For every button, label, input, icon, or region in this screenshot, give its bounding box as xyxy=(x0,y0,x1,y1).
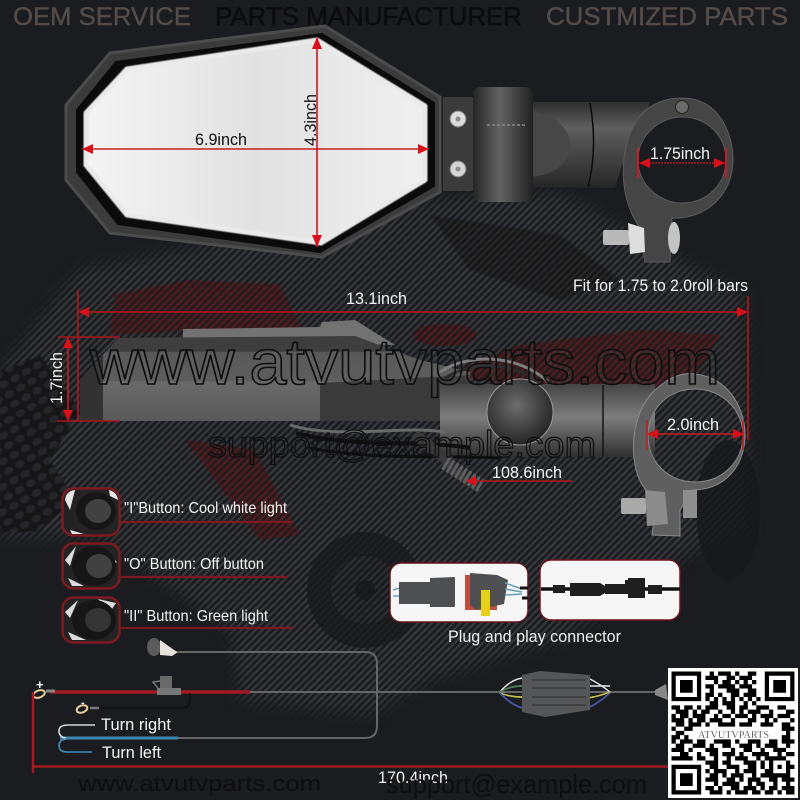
top view: mounting bracket and clamp xyxy=(443,87,733,262)
icon: inline fuse xyxy=(153,676,181,695)
body xyxy=(80,336,470,421)
pivot tube xyxy=(473,87,533,202)
dimension: 170.4 inch total cable: 170.4inch xyxy=(378,768,448,787)
footer: email: support@example.com xyxy=(386,769,647,799)
clamp pin xyxy=(676,100,688,114)
ridged pivot housing xyxy=(440,359,548,384)
arm xyxy=(440,384,655,457)
dimension: 6.9 inch xyxy=(82,130,429,154)
positive ring terminal xyxy=(32,689,55,699)
dimension: 6.9 inch: 6.9inch xyxy=(195,130,247,149)
bracket plate xyxy=(443,97,475,191)
dimension: 13.1 inch xyxy=(78,290,748,440)
dimension: 170.4 inch total cable xyxy=(33,692,668,787)
connector photo: cable plug xyxy=(540,560,680,620)
turn right lead xyxy=(59,725,95,738)
label: turn right: Turn right xyxy=(101,716,171,734)
watermark: website: www.atvutvparts.com xyxy=(89,326,720,398)
header text: service labels: OEM SERVICE xyxy=(13,3,191,31)
label: turn left: Turn left xyxy=(102,744,161,762)
button legend: II button xyxy=(62,598,293,642)
mirror glass xyxy=(86,40,425,243)
red power wire xyxy=(50,690,250,694)
background: carbon fibre car silhouette xyxy=(0,189,752,718)
button legend: O button xyxy=(62,544,288,588)
clamp ring xyxy=(633,374,745,536)
icon: multi-pin wire connector xyxy=(500,671,668,717)
header text: service labels: CUSTMIZED PARTS xyxy=(546,3,788,31)
switch and turn signal cable xyxy=(178,652,377,738)
cables xyxy=(290,425,500,486)
dimension: 2.0 inch xyxy=(647,415,744,450)
main grey cable xyxy=(250,691,655,693)
dimension: 13.1 inch: 13.1inch xyxy=(346,290,407,308)
caption: roll bar fit: Fit for 1.75 to 2.0roll bars xyxy=(573,277,748,295)
clamp ring xyxy=(623,98,733,262)
dimension: 108.6 inch cable xyxy=(466,464,572,486)
button legend: II button: "II" Button: Green light xyxy=(124,608,269,625)
dimension: 2.0 inch: 2.0inch xyxy=(667,415,719,434)
dimension: 1.7 inch: 1.7inch xyxy=(48,352,66,404)
bolt xyxy=(603,222,680,254)
connector photo: waterproof plug xyxy=(390,563,528,622)
button legend: I button: "I"Button: Cool white light xyxy=(124,500,288,517)
header text: service labels xyxy=(13,3,788,31)
symbol: plus: + xyxy=(36,677,44,692)
mirror housing xyxy=(66,26,440,257)
dimension: 1.75 inch xyxy=(638,145,726,178)
top light strip xyxy=(183,320,395,345)
caption: plug and play: Plug and play connector xyxy=(448,628,621,646)
mirror inner frame xyxy=(77,34,434,252)
turn left lead xyxy=(59,739,92,752)
header text: service labels: PARTS MANUFACTURER xyxy=(215,3,522,31)
side view: mirror body xyxy=(80,320,745,536)
top view: mirror xyxy=(66,26,440,257)
pivot ball xyxy=(487,379,553,445)
dimension: 4.3 inch xyxy=(301,37,322,247)
icon: inline switch xyxy=(147,638,178,656)
arm xyxy=(530,102,650,188)
watermark: email: support@example.com xyxy=(208,424,596,465)
button legend: I button xyxy=(62,488,293,536)
dimension: 4.3 inch: 4.3inch xyxy=(301,94,320,146)
button legend: O button: "O" Button: Off button xyxy=(124,556,264,573)
screws xyxy=(450,111,466,177)
QR logo text: ATVUTVPARTS xyxy=(698,730,769,741)
symbol: minus: - xyxy=(81,697,85,709)
dimension: 1.7 inch xyxy=(48,337,120,421)
QR code xyxy=(668,668,798,798)
footer: website: www.atvutvparts.com xyxy=(77,771,321,796)
dimension: 108.6 inch cable: 108.6inch xyxy=(492,464,562,482)
wiring diagram xyxy=(32,652,655,752)
dimension: 1.75 inch: 1.75inch xyxy=(650,145,710,163)
negative ring terminal xyxy=(76,704,99,714)
ground wire xyxy=(100,693,190,708)
blue turn signal xyxy=(60,736,178,740)
clamp bolt xyxy=(621,490,697,526)
